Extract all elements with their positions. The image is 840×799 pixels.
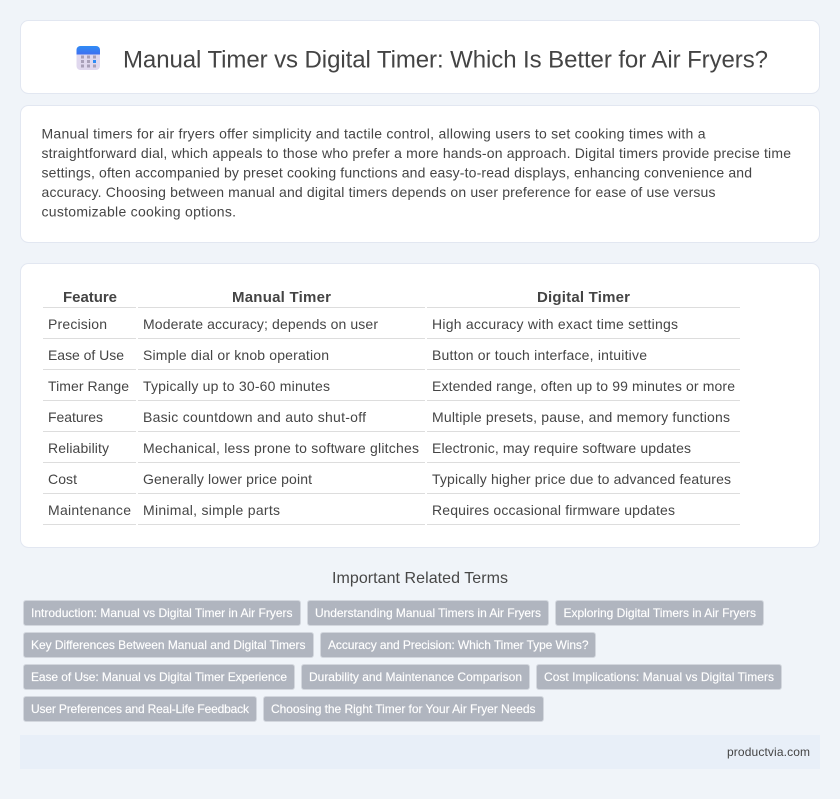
tag	[24, 696, 256, 722]
table row: Features	[43, 409, 740, 432]
tag: Introduction: Manual vs Digital Timer in Air Fryers	[31, 606, 292, 620]
tag: Understanding Manual Timers in Air Fryers	[315, 606, 541, 620]
tag: Cost Implications: Manual vs Digital Timers	[544, 670, 774, 684]
table row: Cost: Typically higher price due to advanced features	[432, 471, 731, 487]
table header row: Manual Timer	[232, 289, 331, 306]
tag	[264, 696, 544, 722]
table row: Precision: Moderate accuracy; depends on user	[143, 316, 378, 332]
table header row: Feature	[63, 289, 117, 306]
table row: Cost	[43, 471, 740, 494]
table row: Precision: High accuracy with exact time settings	[432, 316, 678, 332]
footer source text: productvia.com	[727, 745, 810, 759]
table row: Maintenance: Maintenance	[48, 502, 131, 518]
tag group: related terms	[24, 600, 782, 722]
tag	[320, 632, 596, 658]
table row: Maintenance: Minimal, simple parts	[143, 502, 280, 518]
table header row: Digital Timer	[537, 289, 630, 306]
text block: introduction: Manual timers for air fryers offer simplicity and tactile control, allowing users to set cooking times with a	[42, 126, 706, 142]
table header row	[43, 289, 740, 308]
tag	[24, 600, 300, 626]
table row: Cost: Generally lower price point	[143, 471, 312, 487]
table row: Timer Range: Extended range, often up to 99 minutes or more	[432, 378, 735, 394]
panel: introduction text	[20, 106, 820, 242]
text block: introduction: settings, often accompanied by preset cooking functions and easy-to-read displays, enhancing convenience and	[42, 164, 752, 180]
tag	[24, 664, 294, 690]
table row: Ease of Use: Ease of Use	[48, 347, 124, 363]
table row: Timer Range	[43, 378, 740, 401]
panel: title header	[20, 20, 820, 94]
table row: Timer Range: Timer Range	[48, 378, 129, 394]
footer bar	[20, 735, 820, 769]
table row: Precision: Precision	[48, 316, 107, 332]
table row: Features: Multiple presets, pause, and memory functions	[432, 409, 730, 425]
table row: Reliability: Electronic, may require software updates	[432, 440, 691, 456]
text block: introduction: customizable cooking options.	[42, 204, 236, 220]
title: Manual Timer vs Digital Timer: Which Is Better for Air Fryers?	[123, 46, 768, 74]
panel: comparison table	[20, 264, 820, 548]
tag: Durability and Maintenance Comparison	[309, 670, 522, 684]
tag	[302, 664, 530, 690]
text block: introduction: accuracy. Choosing between manual and digital timers depends on user preference for ease of use versus	[42, 184, 716, 200]
table row: Reliability: Reliability	[48, 440, 109, 456]
table row: Reliability: Mechanical, less prone to software glitches	[143, 440, 419, 456]
text block: introduction: straightforward dial, which appeals to those who prefer a more hands-on approach. Digital timers provide precise time	[42, 145, 791, 161]
tag: Exploring Digital Timers in Air Fryers	[564, 606, 756, 620]
table row: Features: Features	[48, 409, 103, 425]
tag: User Preferences and Real-Life Feedback	[31, 702, 250, 716]
table row: Maintenance: Requires occasional firmware updates	[432, 502, 675, 518]
tag: Ease of Use: Manual vs Digital Timer Experience	[31, 670, 287, 684]
table row: Features: Basic countdown and auto shut-off	[143, 409, 366, 425]
table row: Ease of Use: Button or touch interface, intuitive	[432, 347, 647, 363]
table row: Timer Range: Typically up to 30-60 minutes	[143, 378, 330, 394]
tag: Accuracy and Precision: Which Timer Type Wins?	[328, 638, 589, 652]
table row: Ease of Use: Simple dial or knob operation	[143, 347, 329, 363]
icon: calendar	[76, 46, 100, 70]
tag	[24, 632, 314, 658]
tag: Choosing the Right Timer for Your Air Fryer Needs	[271, 702, 536, 716]
tag	[536, 664, 782, 690]
heading: important related terms: Important Related Terms	[332, 570, 508, 587]
table row: Cost: Cost	[48, 471, 77, 487]
table row: Ease of Use	[43, 347, 740, 370]
tag	[556, 600, 764, 626]
tag: Key Differences Between Manual and Digital Timers	[31, 638, 306, 652]
text block: introduction	[42, 126, 791, 220]
tag	[308, 600, 548, 626]
table row: Precision	[43, 316, 740, 339]
table row: Reliability	[43, 440, 740, 463]
table row: Maintenance	[43, 502, 740, 525]
